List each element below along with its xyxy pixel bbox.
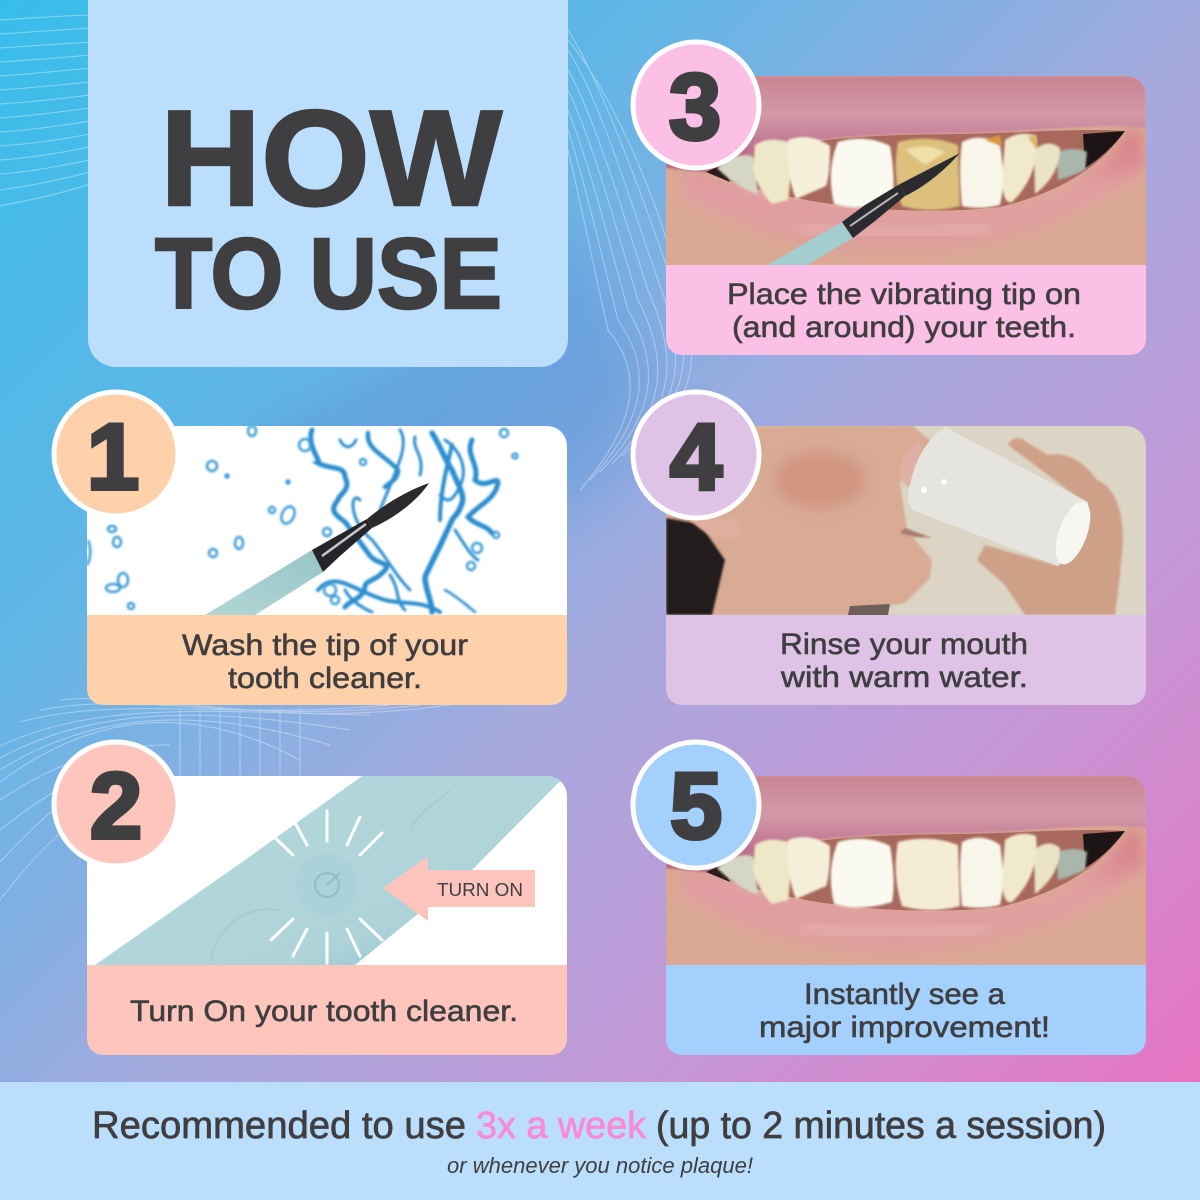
- badge: number 5: [633, 742, 759, 868]
- footer band: [0, 1082, 1200, 1200]
- background line pattern: right wave: [568, 30, 691, 490]
- badge: number 2: 2: [90, 753, 142, 858]
- caption panel step 1: [87, 595, 567, 705]
- arrow: turn on: TURN ON: [437, 879, 523, 900]
- panel: step 2 turn on: [54, 742, 567, 1055]
- caption panel step 3: [666, 245, 1146, 355]
- background line pattern: lower wave: [0, 698, 450, 900]
- caption: rinse: [780, 628, 1028, 694]
- badge: number 4: [633, 392, 759, 518]
- caption: improvement: Instantly see a: [804, 978, 1005, 1011]
- caption panel step 5: [666, 945, 1146, 1055]
- panel: step 5 improvement: [633, 742, 1146, 1055]
- caption panel step 4: [666, 595, 1146, 705]
- badge: number 3: 3: [669, 54, 721, 159]
- caption: wash the tip: Wash the tip of your: [182, 629, 468, 662]
- title: TO USE: TO USE: [155, 218, 502, 330]
- caption: rinse: with warm water.: [780, 661, 1028, 694]
- panel: step 1 wash the tip: [54, 392, 567, 705]
- cup: [908, 427, 1088, 566]
- footnote: or whenever you notice plaque!: [447, 1153, 753, 1178]
- recommendation text: 3x a week: [476, 1105, 647, 1147]
- panel: step 3 place the tip: [633, 42, 1146, 355]
- recommendation text: Recommended to use: [92, 1105, 466, 1147]
- panel: step 4 rinse: [633, 392, 1146, 705]
- badge: number 2: [54, 742, 178, 866]
- caption: place the tip: [727, 278, 1081, 344]
- caption: wash the tip: [182, 629, 468, 695]
- badge: number 3: [633, 42, 759, 168]
- background wave band: [240, 220, 660, 640]
- caption panel step 2: [87, 945, 567, 1055]
- caption: turn on: Turn On your tooth cleaner.: [130, 995, 518, 1028]
- recommendation text: [92, 1105, 1106, 1147]
- background line pattern: top left: [0, 15, 90, 206]
- caption: wash the tip: tooth cleaner.: [228, 662, 422, 695]
- caption: rinse: Rinse your mouth: [780, 628, 1028, 661]
- photo: water splash and tooth cleaner: [87, 426, 567, 615]
- badge: number 1: [54, 392, 178, 516]
- recommendation text: (up to 2 minutes a session): [656, 1105, 1106, 1147]
- arrow: turn on: [383, 856, 535, 921]
- title: HOW: HOW: [160, 82, 503, 234]
- tooth cleaner tip: [767, 153, 960, 265]
- badge: number 5: 5: [670, 753, 722, 858]
- tooth cleaner handle and tip: [205, 483, 429, 615]
- photo: person rinsing with cup: [666, 426, 1146, 615]
- caption: place the tip: (and around) your teeth.: [732, 311, 1076, 344]
- power rays: [270, 811, 382, 963]
- photo: clean smile: [666, 776, 1146, 965]
- photo: tooth cleaner power button: [87, 776, 567, 965]
- photo: smile with stained tooth and tip: [666, 76, 1146, 265]
- badge: number 1: 1: [87, 404, 139, 509]
- caption: place the tip: Place the vibrating tip on: [727, 278, 1081, 311]
- caption: improvement: [759, 978, 1050, 1044]
- hand behind cup: [977, 438, 1123, 615]
- face: [666, 426, 932, 615]
- caption: improvement: major improvement!: [759, 1011, 1050, 1044]
- title panel: [88, 0, 568, 367]
- badge: number 4: 4: [670, 404, 722, 509]
